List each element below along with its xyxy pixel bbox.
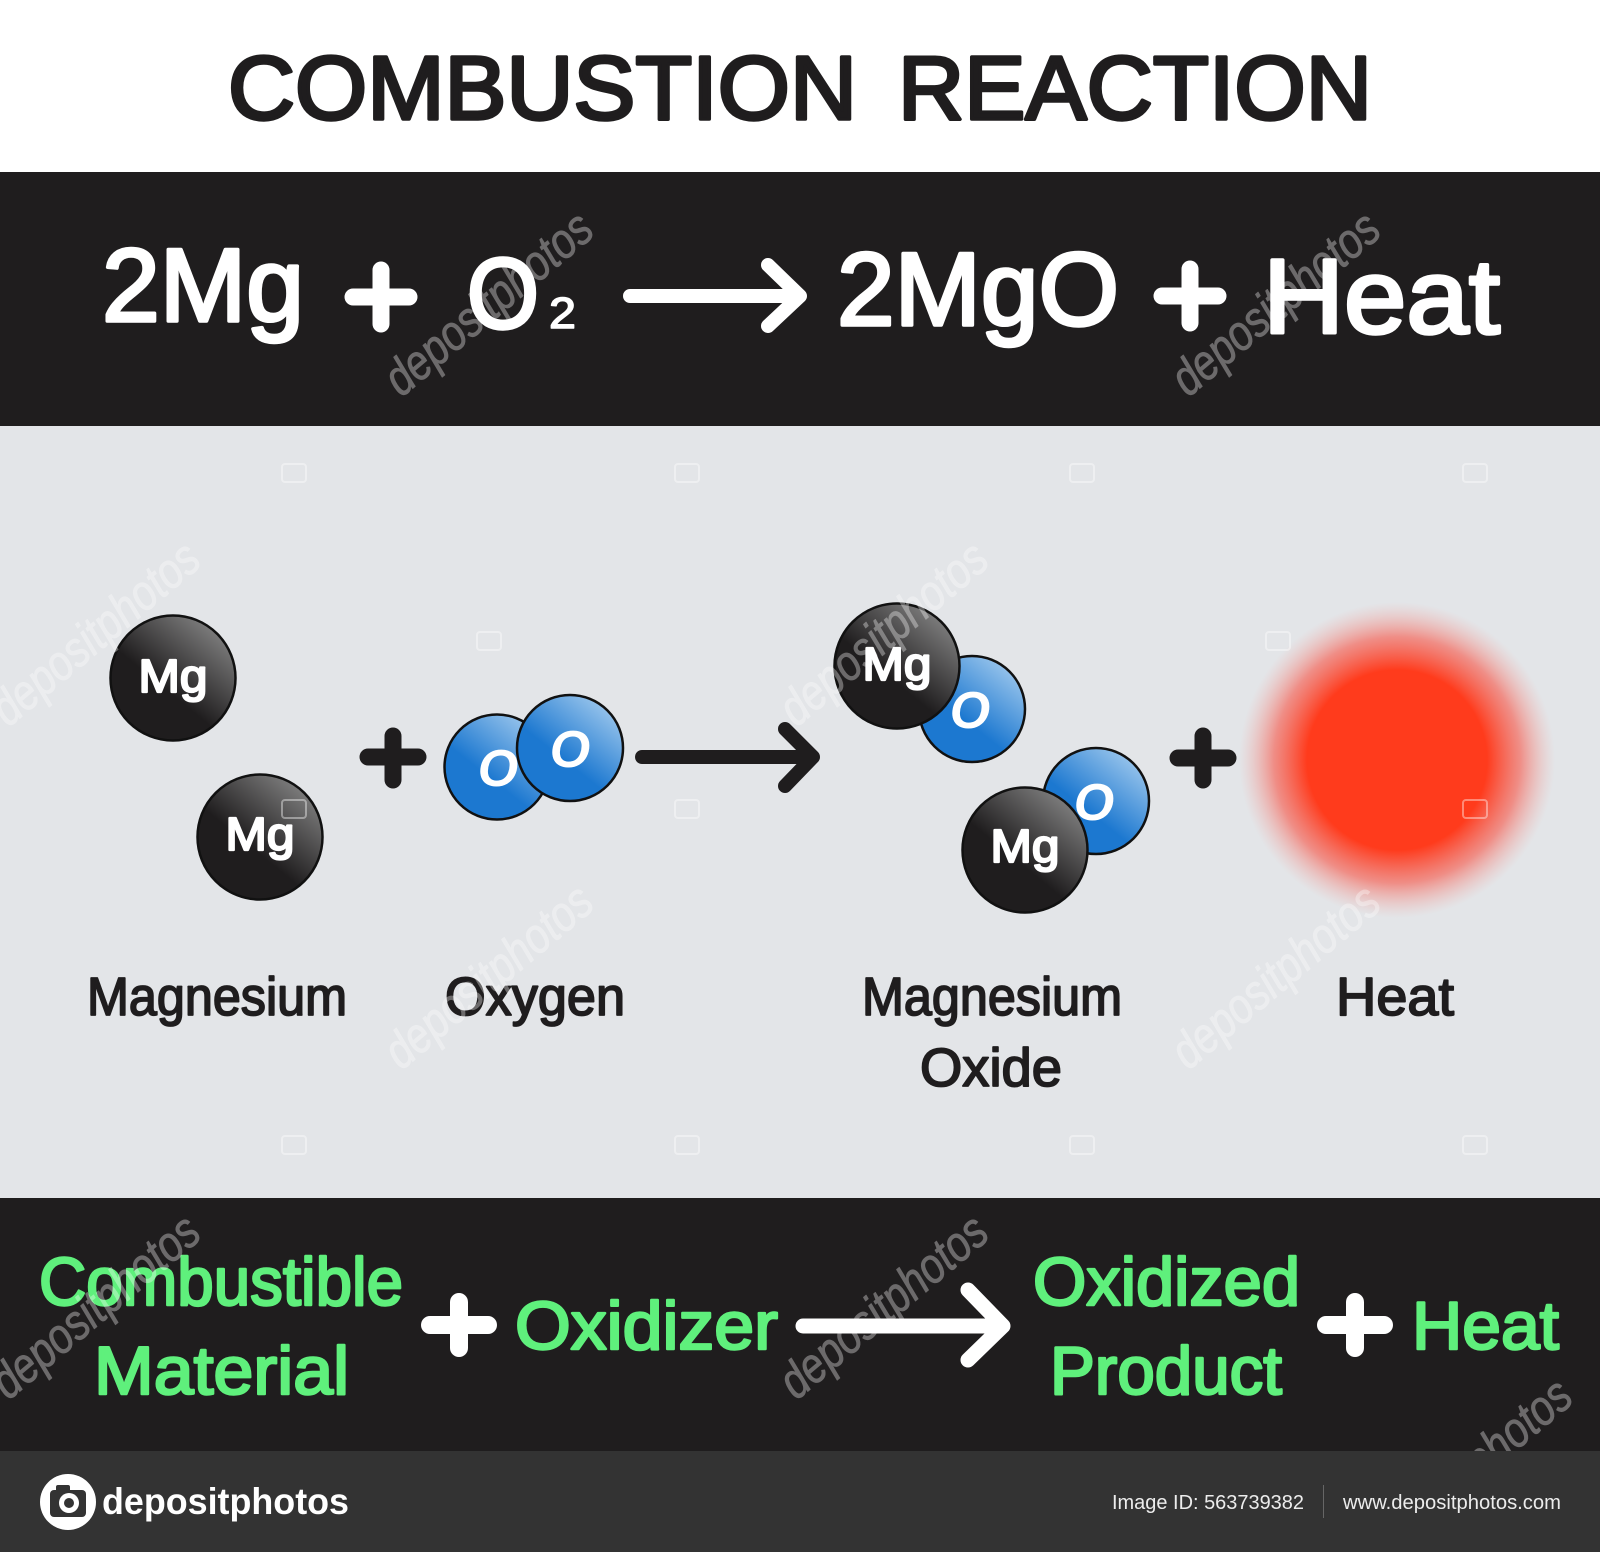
label: magnesium oxide: Magnesium	[862, 967, 1122, 1027]
molecule: oxygen	[444, 695, 623, 820]
heat glow	[1239, 602, 1555, 918]
panel: general word equation band	[0, 1198, 1600, 1451]
molecule: magnesium oxide 1: Mg	[862, 638, 932, 690]
plus sign	[368, 736, 418, 780]
equation term: O2: O	[467, 238, 539, 350]
title: REACTION	[898, 39, 1372, 139]
plus sign	[1162, 269, 1218, 323]
term: oxidizer: Oxidizer	[515, 1288, 778, 1364]
title: COMBUSTION	[228, 39, 857, 139]
equation term: Heat: Heat	[1263, 238, 1500, 356]
equation term: O2: 2	[549, 289, 576, 338]
icon: depositphotos camera logo	[40, 1474, 96, 1530]
watermark overlay: depositphotos	[372, 873, 604, 1079]
watermark overlay: depositphotos	[767, 530, 999, 736]
watermark overlay: depositphotos	[372, 200, 604, 406]
term: oxidized product: Product	[1050, 1333, 1282, 1409]
atom: magnesium 1	[110, 616, 236, 740]
plus sign	[353, 270, 409, 324]
plus sign	[1178, 736, 1228, 780]
watermark overlay: depositphotos	[1159, 200, 1391, 406]
watermark overlay: depositphotos	[767, 1203, 999, 1409]
molecule: oxygen: O	[550, 721, 590, 779]
plus sign	[1326, 1302, 1384, 1348]
reaction arrow	[642, 729, 813, 786]
plus sign	[430, 1302, 488, 1348]
label: magnesium oxide: Oxide	[920, 1038, 1062, 1098]
footer bar	[0, 1451, 1600, 1552]
molecule: magnesium oxide 2: O	[1074, 774, 1114, 832]
term: oxidized product: Oxidized	[1033, 1244, 1300, 1320]
term: oxidized product	[1033, 1244, 1300, 1409]
reaction arrow	[630, 265, 800, 326]
equation term: 2MgO: 2MgO	[837, 232, 1119, 348]
atom: magnesium 2	[198, 774, 322, 900]
term: heat: Heat	[1412, 1288, 1559, 1364]
molecule: oxygen: O	[478, 740, 518, 798]
molecule: magnesium oxide 2: Mg	[990, 820, 1060, 872]
molecule: magnesium oxide 1: O	[950, 682, 990, 740]
term: combustible material	[39, 1244, 403, 1409]
atom: magnesium 2: Mg	[226, 808, 294, 860]
molecule: magnesium oxide 1	[834, 604, 1025, 762]
label: oxygen: Oxygen	[445, 967, 625, 1027]
logo wordmark: depositphotos	[102, 1481, 349, 1522]
term: combustible material: Material	[94, 1333, 349, 1409]
equation term: 2Mg: 2Mg	[102, 228, 304, 344]
molecule: magnesium oxide 2	[962, 748, 1149, 912]
panel: chemical equation band	[0, 172, 1600, 426]
watermark overlay: depositphotos	[1159, 873, 1391, 1079]
label: magnesium oxide	[862, 967, 1122, 1098]
atom: magnesium 1: Mg	[138, 650, 208, 702]
image id: Image ID: 563739382	[1112, 1492, 1304, 1514]
term: combustible material: Combustible	[39, 1244, 403, 1320]
website: www.depositphotos.com	[1342, 1492, 1561, 1514]
panel: molecular diagram	[0, 426, 1600, 1198]
label: magnesium: Magnesium	[87, 967, 347, 1027]
title	[228, 39, 1372, 139]
label: heat: Heat	[1336, 967, 1454, 1027]
reaction arrow	[803, 1290, 1003, 1360]
